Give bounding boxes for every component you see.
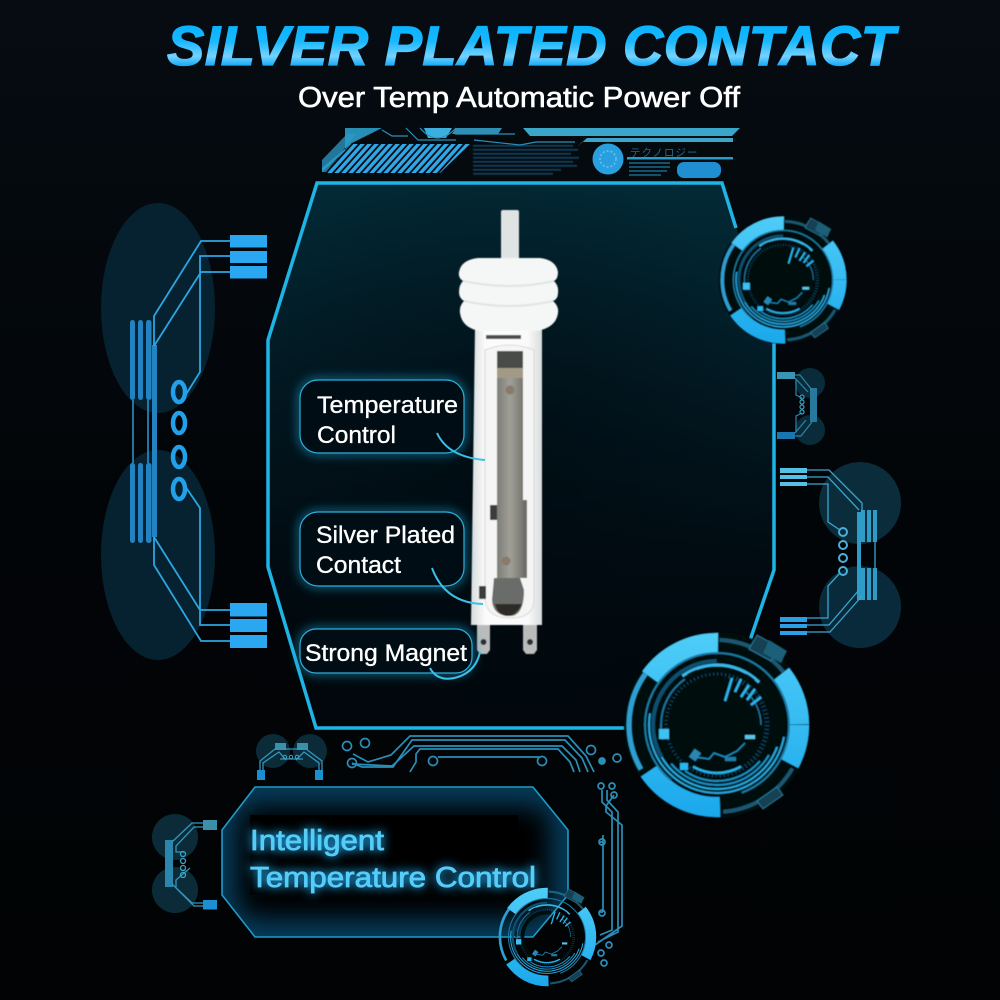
metal strip (497, 378, 523, 578)
microtext block (473, 145, 579, 175)
switch block (497, 351, 523, 381)
callout: silver plated contact (300, 512, 483, 604)
heading glow (250, 825, 536, 894)
inner recess (485, 345, 534, 618)
pins (477, 622, 490, 654)
heading glow: Temperature Control (250, 862, 536, 894)
subtitle: Over Temp Automatic Power Off (298, 82, 741, 114)
dial: large lower right (624, 632, 810, 818)
hatched block (325, 144, 470, 173)
dial: upper right (719, 216, 847, 344)
round emblem (592, 144, 624, 174)
shaft (501, 210, 519, 260)
title: SILVER PLATED CONTACT (167, 14, 900, 77)
main frame (268, 183, 774, 728)
product: thermostat (459, 210, 558, 654)
heading glow: Temperature Control (250, 862, 536, 894)
left circuit (101, 203, 267, 660)
label strip (486, 335, 521, 339)
callout: temperature control (300, 380, 485, 460)
panel: intelligent temperature control (222, 787, 568, 937)
callout: silver plated contact: Contact (316, 552, 401, 579)
heading glow: Intelligent (250, 825, 384, 857)
callout: temperature control: Temperature (317, 392, 458, 419)
body (471, 328, 542, 625)
right upper small circuit (777, 368, 825, 445)
dial: bottom (500, 889, 594, 984)
top tech banner: テクノロジー (630, 147, 698, 159)
heading glow: Intelligent (250, 825, 384, 857)
bottom circuit traces (342, 736, 622, 966)
callout: strong magnet (300, 629, 480, 679)
callout: strong magnet: Strong Magnet (305, 640, 467, 667)
magnet (492, 578, 524, 616)
callout: temperature control: Control (317, 422, 396, 449)
right lower circuit (780, 462, 901, 648)
bottom left small circuit (256, 734, 327, 780)
top tech banner (322, 128, 740, 178)
callout: silver plated contact: Silver Plated (316, 522, 455, 549)
left small circuit by panel (152, 814, 217, 913)
cap (459, 258, 558, 331)
